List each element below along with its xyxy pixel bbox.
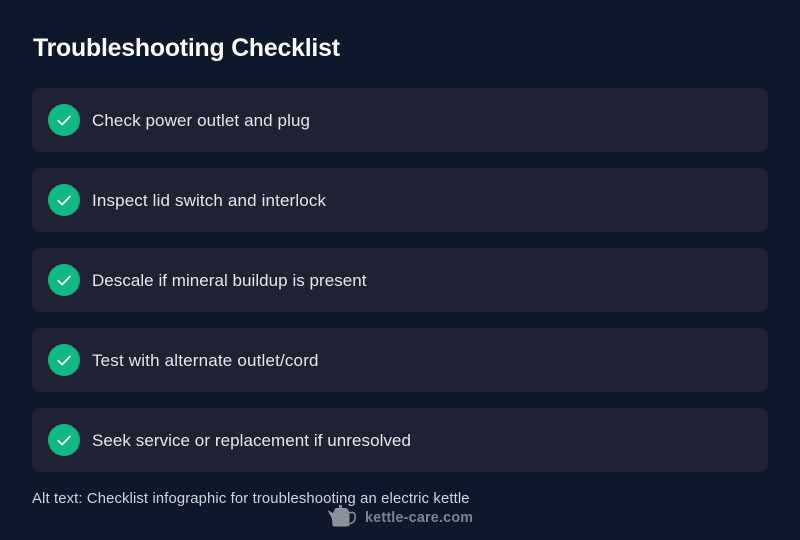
checklist <box>32 88 768 472</box>
checklist item 3 <box>32 248 768 312</box>
checklist item 5: Seek service or replacement if unresolved <box>92 431 411 450</box>
checklist item 1 <box>32 88 768 152</box>
watermark text: kettle-care.com <box>365 510 473 526</box>
checklist item 3: Descale if mineral buildup is present <box>92 271 367 290</box>
checklist item 4: Test with alternate outlet/cord <box>92 351 318 370</box>
alt text caption: Alt text: Checklist infographic for troubleshooting an electric kettle <box>32 491 470 507</box>
checklist item 1: Check power outlet and plug <box>92 111 310 130</box>
watermark: kettle-care.com <box>328 505 473 526</box>
icon: kettle <box>328 505 355 526</box>
checklist item 4 <box>32 328 768 392</box>
checklist item 2: Inspect lid switch and interlock <box>92 191 326 210</box>
title: Troubleshooting Checklist <box>33 35 340 62</box>
checklist item 2 <box>32 168 768 232</box>
checklist item 5 <box>32 408 768 472</box>
